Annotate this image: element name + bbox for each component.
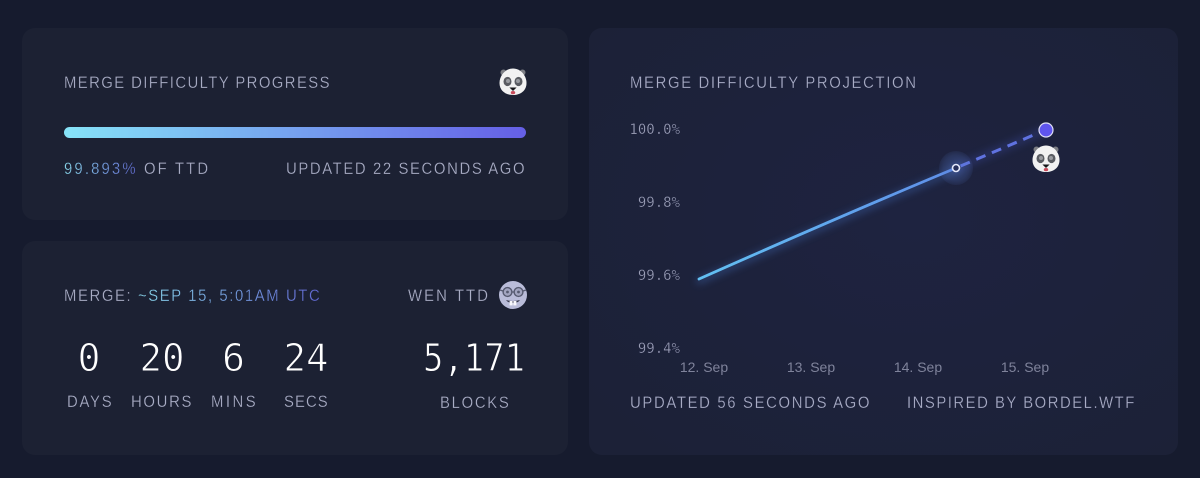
updated time: UPDATED 22 SECONDS AGO bbox=[286, 160, 525, 178]
merge target marker bbox=[1039, 123, 1053, 137]
wen ttd label: WEN TTD bbox=[408, 287, 488, 305]
y axis labels: 100.0% bbox=[629, 122, 681, 138]
icon: panda on chart bbox=[1032, 146, 1060, 172]
x axis labels bbox=[680, 359, 1049, 375]
blocks counter: 5,171 bbox=[423, 336, 525, 380]
countdown: hours: HOURS bbox=[131, 393, 191, 411]
x axis labels: 15. Sep bbox=[1001, 359, 1049, 375]
credit: INSPIRED BY BORDEL.WTF bbox=[907, 394, 1135, 412]
countdown: secs bbox=[284, 336, 328, 411]
countdown: mins: 6 bbox=[222, 336, 245, 380]
heading: projection: MERGE DIFFICULTY PROJECTION bbox=[630, 74, 916, 92]
icon: panda bbox=[500, 68, 526, 95]
progress percentage: 99.893% OF TTD bbox=[64, 160, 208, 178]
panel: countdown bbox=[22, 241, 568, 455]
x axis labels: 12. Sep bbox=[680, 359, 728, 375]
y axis labels: 99.6% bbox=[638, 268, 681, 284]
y axis labels: 99.8% bbox=[638, 195, 681, 211]
merge date: MERGE: ~SEP 15, 5:01AM UTC bbox=[64, 287, 320, 305]
x axis labels: 14. Sep bbox=[894, 359, 942, 375]
countdown: days: 0 bbox=[78, 336, 100, 380]
countdown: secs: SECS bbox=[284, 393, 328, 411]
current marker bbox=[939, 151, 973, 185]
countdown: hours bbox=[131, 336, 191, 411]
blocks counter: BLOCKS bbox=[440, 394, 509, 412]
countdown: mins: MINS bbox=[211, 393, 256, 411]
y axis labels: 99.4% bbox=[638, 341, 681, 357]
line chart: projected dashed segment bbox=[956, 130, 1046, 168]
countdown: secs: 24 bbox=[284, 336, 328, 380]
progress bar bbox=[64, 127, 526, 138]
panel: merge difficulty projection bbox=[589, 28, 1178, 455]
countdown: days bbox=[67, 336, 112, 411]
countdown: days: DAYS bbox=[67, 393, 112, 411]
heading: progress: MERGE DIFFICULTY PROGRESS bbox=[64, 74, 330, 92]
y axis labels bbox=[629, 122, 681, 357]
countdown: hours: 20 bbox=[140, 336, 184, 380]
updated time: UPDATED 56 SECONDS AGO bbox=[630, 394, 869, 412]
countdown: mins bbox=[211, 336, 256, 411]
line chart: difficulty history bbox=[699, 168, 956, 281]
panel: merge difficulty progress bbox=[22, 28, 568, 220]
icon: nerd face bbox=[499, 281, 527, 309]
blocks counter bbox=[423, 336, 525, 412]
x axis labels: 13. Sep bbox=[787, 359, 835, 375]
